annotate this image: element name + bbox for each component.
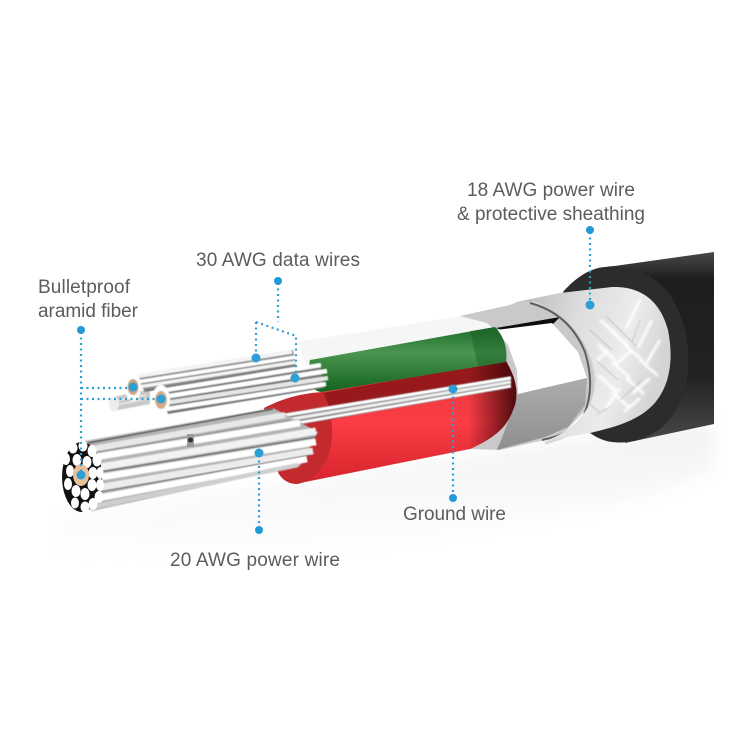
ground wire <box>280 376 511 428</box>
green wire <box>309 327 506 392</box>
label: 30 AWG data wires: 30 AWG data wires <box>196 250 360 271</box>
lower data wire <box>160 364 328 414</box>
red insulation <box>264 361 517 484</box>
leader: 30 AWG <box>252 277 300 382</box>
wire ends <box>125 373 141 401</box>
leader: aramid fiber <box>76 326 166 480</box>
leader: 20 AWG <box>254 448 264 534</box>
braided shielding <box>517 287 671 441</box>
aramid fiber <box>109 389 150 412</box>
leader: 18 AWG <box>586 226 594 310</box>
upper data wire <box>134 350 297 392</box>
label: 18 AWG power wire: 18 AWG power wire <box>467 180 635 201</box>
label: 20 AWG power wire: 20 AWG power wire <box>170 550 340 571</box>
label: Ground wire: Ground wire <box>403 504 506 525</box>
leader: ground wire <box>448 384 458 502</box>
bundle end face <box>62 440 104 512</box>
data wires <box>109 350 328 415</box>
label: protective sheathing: & protective sheathing <box>457 204 645 225</box>
foil band and shield <box>460 293 600 450</box>
20 AWG power wire bundle <box>70 408 318 511</box>
cable illustration <box>62 252 714 512</box>
label: aramid fiber: aramid fiber <box>38 301 139 322</box>
small fiber speck <box>187 434 194 447</box>
white sleeve <box>298 316 500 380</box>
floor shadow <box>60 420 714 560</box>
label: Bulletproof: Bulletproof <box>38 277 131 298</box>
black outer jacket <box>563 252 714 443</box>
